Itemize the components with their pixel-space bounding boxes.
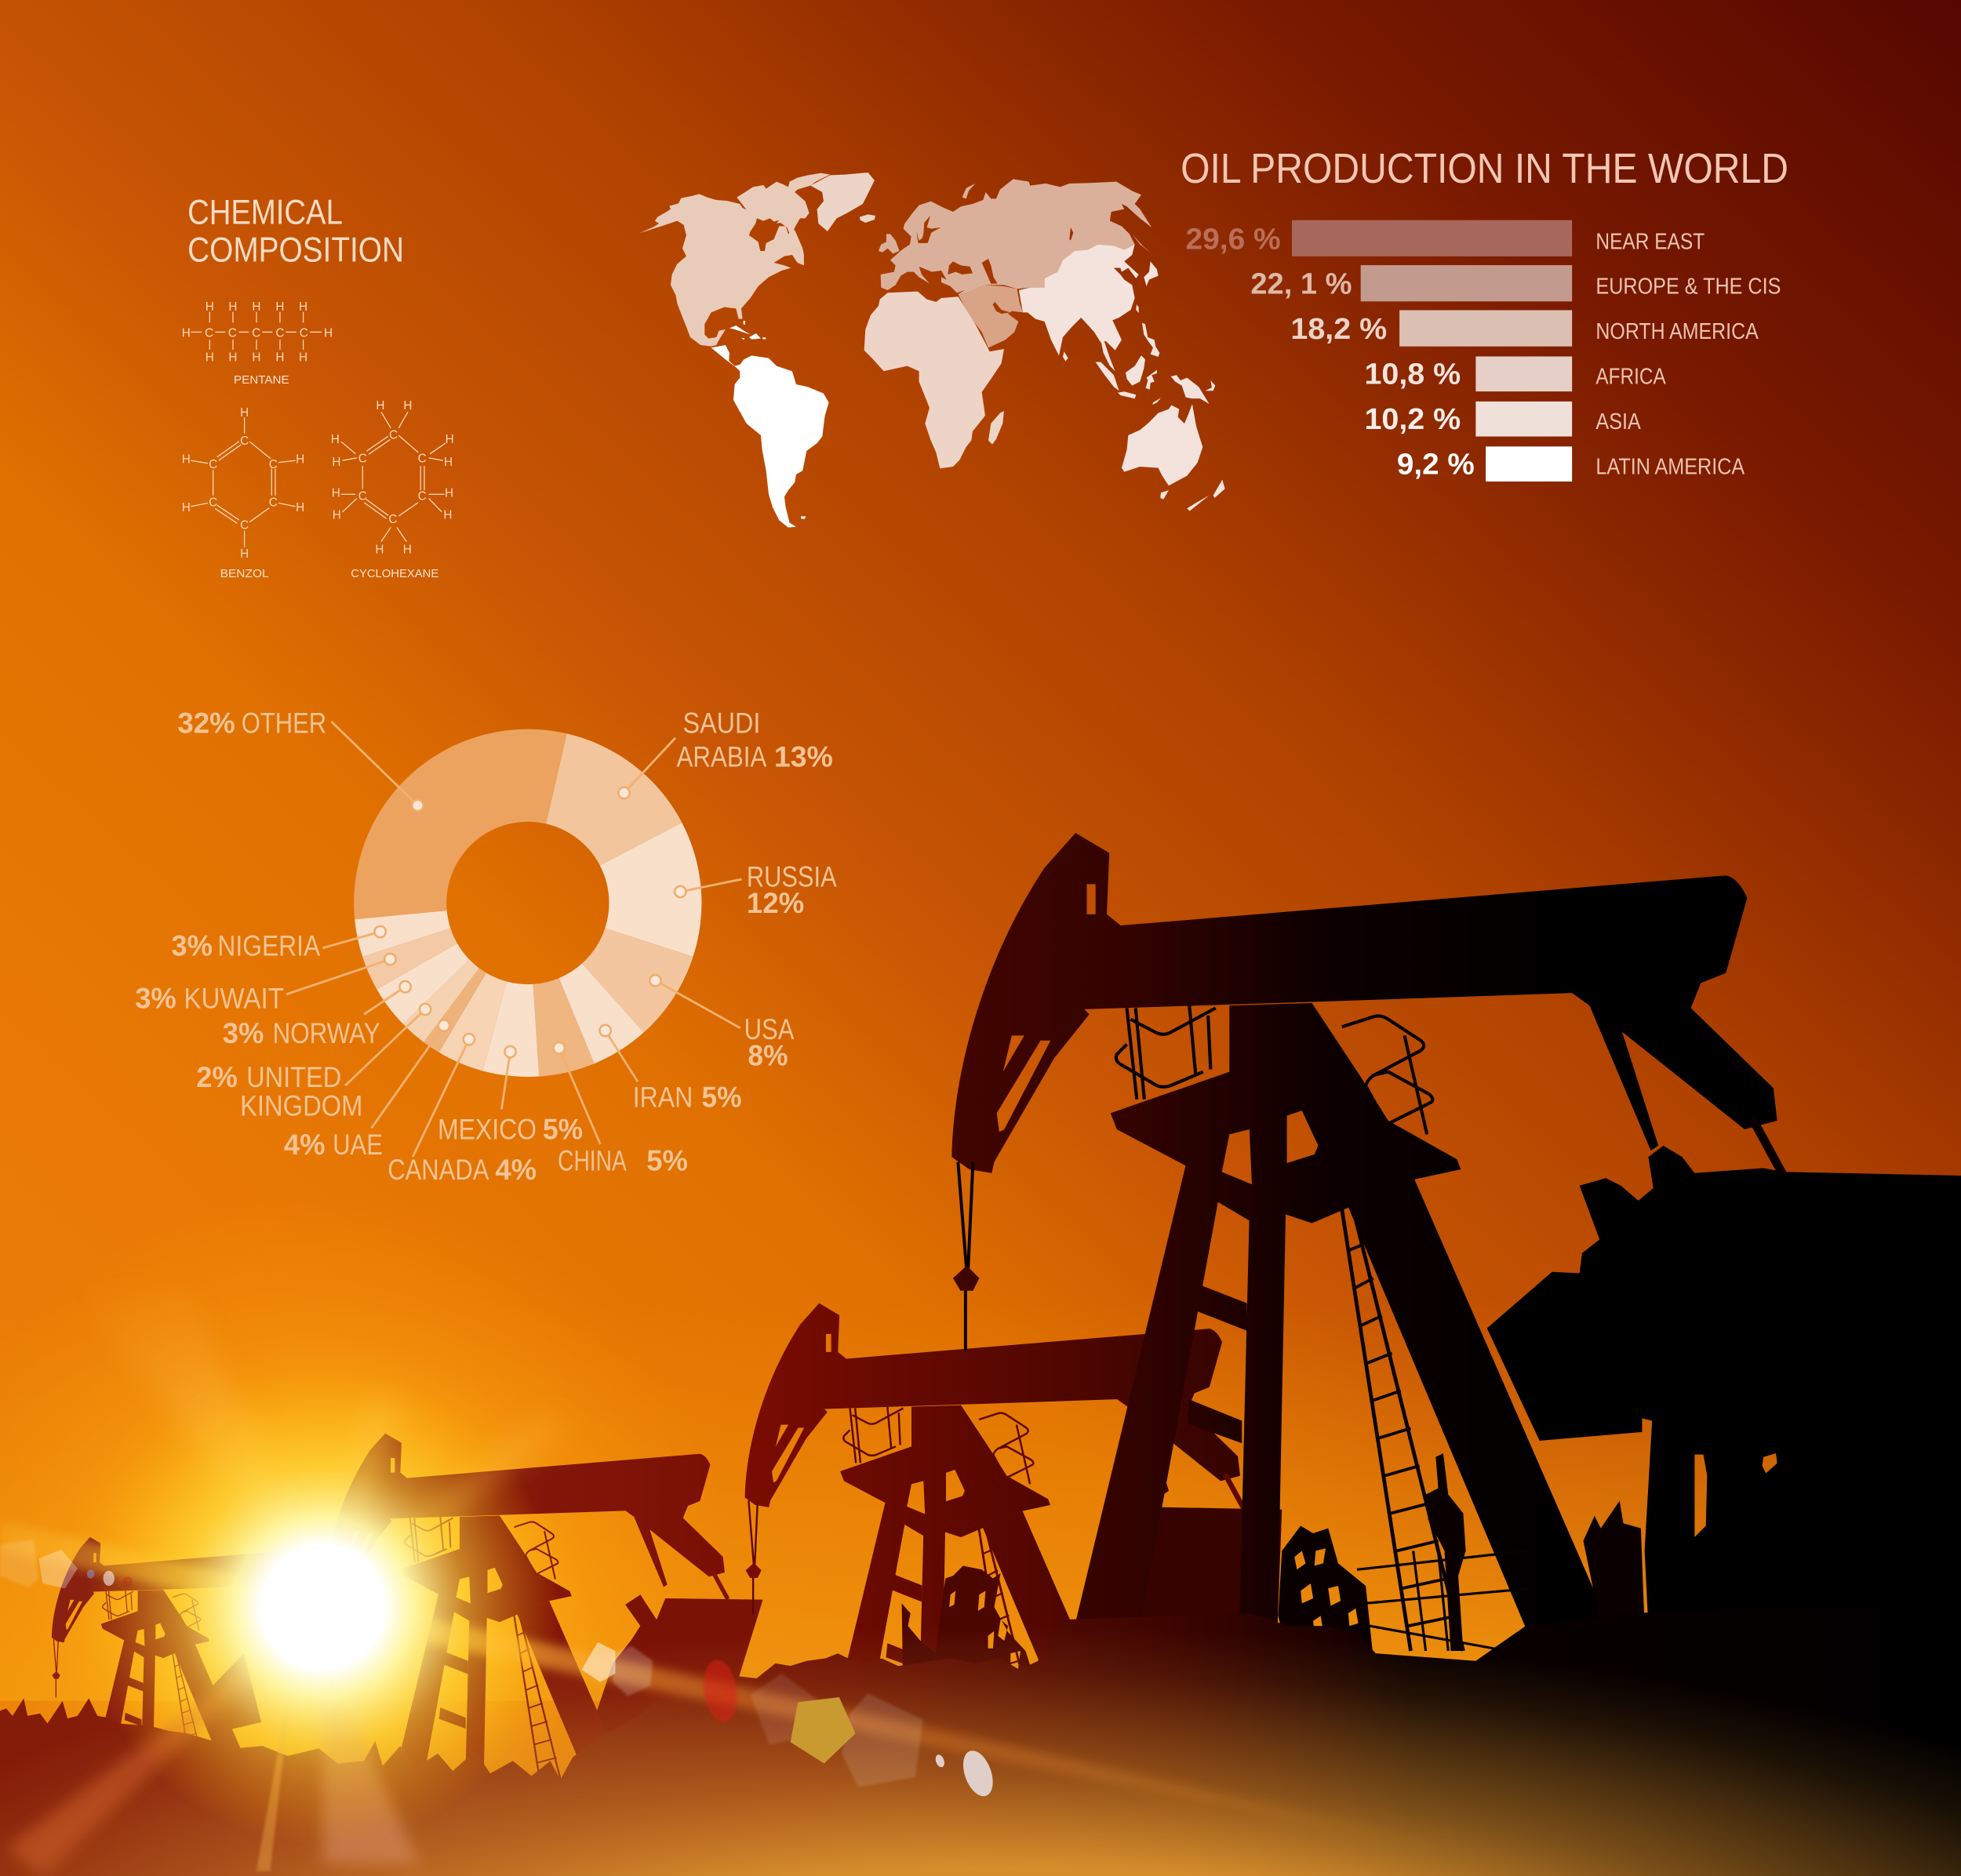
donut labels: SAUDI xyxy=(683,707,760,739)
segment: canada xyxy=(439,973,507,1071)
diagram: pentane xyxy=(182,300,333,387)
diagram: cyclohexane: H xyxy=(444,456,453,469)
diagram: cyclohexane: H xyxy=(446,433,454,446)
bar row: latin america xyxy=(1397,446,1745,482)
bar row: africa: AFRICA xyxy=(1595,365,1666,390)
segment: usa xyxy=(582,928,693,1033)
pump jack 2 with engine xyxy=(745,1303,1282,1839)
donut labels: UNITED xyxy=(246,1061,341,1093)
donut labels: USA xyxy=(744,1013,795,1045)
diagram: benzol: BENZOL xyxy=(220,568,269,580)
diagram: cyclohexane: H xyxy=(331,433,340,446)
donut labels: 3% xyxy=(135,982,176,1014)
heading: chemical composition: CHEMICAL xyxy=(187,193,343,231)
diagram: pentane: H xyxy=(228,300,238,314)
diagram: benzol xyxy=(182,406,304,580)
donut labels: RUSSIA xyxy=(747,861,837,893)
donut labels: 32% xyxy=(177,707,235,739)
diagram: cyclohexane: C xyxy=(389,428,398,442)
diagram: benzol: H xyxy=(296,453,304,466)
diagram: pentane: H xyxy=(228,351,238,364)
segment: mexico xyxy=(482,981,539,1077)
diagram: pentane: C xyxy=(300,326,308,340)
diagram: benzol: C xyxy=(269,458,278,471)
diagram: pentane: H xyxy=(275,300,284,314)
diagram: cyclohexane: H xyxy=(332,486,340,500)
diagram: cyclohexane: CYCLOHEXANE xyxy=(351,568,438,580)
donut labels: 13% xyxy=(774,741,833,773)
donut labels: OTHER xyxy=(242,707,326,739)
lens flare shapes xyxy=(0,1540,999,1800)
diagram: benzol: C xyxy=(209,496,217,510)
bar row: asia xyxy=(1364,402,1642,437)
diagram: pentane: C xyxy=(228,326,237,340)
diagram: cyclohexane: H xyxy=(403,543,412,557)
diagram: cyclohexane: H xyxy=(375,543,384,557)
donut labels: 5% xyxy=(543,1114,583,1146)
donut labels: 3% xyxy=(223,1017,264,1049)
donut labels: UAE xyxy=(333,1129,383,1161)
sun core and near glow xyxy=(85,1369,560,1845)
diagram: cyclohexane: C xyxy=(358,489,367,504)
diagram: pentane: H xyxy=(299,351,307,364)
diagram: benzol: H xyxy=(182,453,191,466)
segment: iran xyxy=(559,964,644,1063)
diagram: cyclohexane: C xyxy=(418,489,427,504)
lens streak xyxy=(0,1521,1501,1861)
bar row: latin america: 9,2 % xyxy=(1397,447,1475,481)
bar row: europe and the cis xyxy=(1250,265,1781,301)
diagram: benzol: H xyxy=(182,501,191,514)
bar row: near east xyxy=(1185,220,1705,256)
asia xyxy=(1019,245,1159,355)
africa xyxy=(864,292,1004,468)
pump jack 3 with engine xyxy=(326,1433,763,1866)
bush near second pump xyxy=(902,1566,1035,1682)
region: eurasia xyxy=(879,179,1159,355)
donut labels: 3% xyxy=(171,929,213,962)
bar row: north america: 18,2 % xyxy=(1290,312,1387,346)
donut labels: 5% xyxy=(646,1145,688,1177)
diagram: benzol: H xyxy=(240,547,249,561)
diagram: pentane: H xyxy=(299,300,307,314)
diagram: pentane: H xyxy=(182,326,191,340)
segment: united kingdom xyxy=(403,959,479,1042)
latin america xyxy=(711,321,829,528)
donut labels: 12% xyxy=(747,887,804,919)
bar row: near east: NEAR EAST xyxy=(1595,229,1705,254)
region: americas xyxy=(639,173,875,528)
diagram: cyclohexane: H xyxy=(376,399,384,413)
heading: chemical composition xyxy=(187,193,404,269)
bar row: asia: ASIA xyxy=(1595,409,1642,434)
bar row: latin america: LATIN AMERICA xyxy=(1595,454,1745,479)
diagram: cyclohexane: H xyxy=(332,456,340,469)
diagram: benzol: C xyxy=(209,458,217,471)
donut labels: 2% xyxy=(196,1061,238,1093)
donut labels: KUWAIT xyxy=(184,982,284,1014)
leader dots xyxy=(375,787,686,1057)
south-east asia and oceania xyxy=(1063,304,1225,511)
bar row: north america xyxy=(1290,310,1759,347)
north america and greenland xyxy=(639,173,875,347)
world map xyxy=(639,173,1225,528)
diagram: pentane: H xyxy=(275,351,284,364)
donut labels: CANADA xyxy=(387,1154,489,1186)
segment: saudi arabia xyxy=(546,733,682,866)
donut labels: KINGDOM xyxy=(240,1089,362,1122)
segment: china xyxy=(533,978,595,1077)
diagram: pentane: H xyxy=(252,300,260,314)
diagram: pentane: H xyxy=(252,351,260,364)
donut labels: NORWAY xyxy=(273,1017,380,1049)
bar row: africa: 10,8 % xyxy=(1364,358,1461,391)
diagram: benzol: C xyxy=(240,518,249,533)
diagram: cyclohexane: C xyxy=(418,452,427,465)
segment: russia xyxy=(600,823,701,957)
bar row: europe and the cis: EUROPE & THE CIS xyxy=(1595,274,1781,300)
segment: kuwait xyxy=(362,928,457,990)
segment: uae xyxy=(424,968,486,1053)
donut chart xyxy=(354,729,701,1077)
bushes and wellhead near big pump xyxy=(1278,1453,1645,1657)
donut labels: ARABIA xyxy=(677,741,767,773)
segment: nigeria xyxy=(355,911,450,957)
diagram: cyclohexane: C xyxy=(388,513,397,526)
bar row: europe and the cis: 22, 1 % xyxy=(1250,267,1352,301)
bar row: north america: NORTH AMERICA xyxy=(1595,319,1759,344)
heading: chemical composition: COMPOSITION xyxy=(187,231,404,269)
segment: other xyxy=(354,729,567,919)
heading: oil production in the world: OIL PRODUCTION IN THE WORLD xyxy=(1181,145,1788,192)
donut labels: IRAN xyxy=(633,1081,693,1113)
donut labels: 8% xyxy=(748,1040,788,1072)
bar row: near east: 29,6 % xyxy=(1185,222,1281,256)
diagram: cyclohexane: C xyxy=(358,452,367,465)
sun glow behind silhouettes xyxy=(0,1194,736,1876)
segment: norway xyxy=(377,943,469,1024)
near east xyxy=(959,285,1023,347)
europe and the cis xyxy=(881,179,1151,294)
diagram: cyclohexane: H xyxy=(443,508,452,522)
diagram: cyclohexane: H xyxy=(333,508,341,522)
donut labels: MEXICO xyxy=(438,1114,537,1146)
diagram: pentane: C xyxy=(275,326,284,340)
bar chart xyxy=(1185,220,1781,482)
diagram: cyclohexane xyxy=(331,399,454,580)
diagram: benzol: H xyxy=(296,501,304,514)
leader lines xyxy=(286,722,741,1157)
region: africa and oceania xyxy=(864,292,1225,511)
sun rays xyxy=(6,1289,575,1876)
diagram: benzol: C xyxy=(269,496,278,510)
bar row: africa xyxy=(1364,356,1666,391)
donut labels: CHINA xyxy=(558,1145,627,1177)
diagram: benzol: H xyxy=(240,406,249,420)
diagram: pentane: H xyxy=(206,351,214,364)
donut labels: 4% xyxy=(495,1154,537,1186)
diagram: pentane: H xyxy=(206,300,214,314)
diagram: cyclohexane: H xyxy=(445,486,453,500)
diagram: cyclohexane: H xyxy=(403,399,412,413)
diagram: pentane: PENTANE xyxy=(234,374,289,387)
ground with grass xyxy=(0,1601,1961,1876)
bar row: asia: 10,2 % xyxy=(1364,402,1461,436)
chemical diagrams xyxy=(182,300,454,580)
donut labels: NIGERIA xyxy=(217,929,321,962)
diagram: benzol: C xyxy=(240,434,249,448)
diagram: pentane: C xyxy=(252,326,260,340)
golden haze over ground xyxy=(0,1626,1961,1876)
diagram: pentane: H xyxy=(324,326,333,340)
donut labels: 4% xyxy=(284,1129,326,1161)
donut labels xyxy=(135,707,837,1186)
diagram: pentane: C xyxy=(205,326,213,340)
pump jack 4: far left xyxy=(52,1537,310,1814)
donut labels: 5% xyxy=(701,1081,741,1113)
pump jack 1: foreground with engine xyxy=(951,833,1961,1726)
